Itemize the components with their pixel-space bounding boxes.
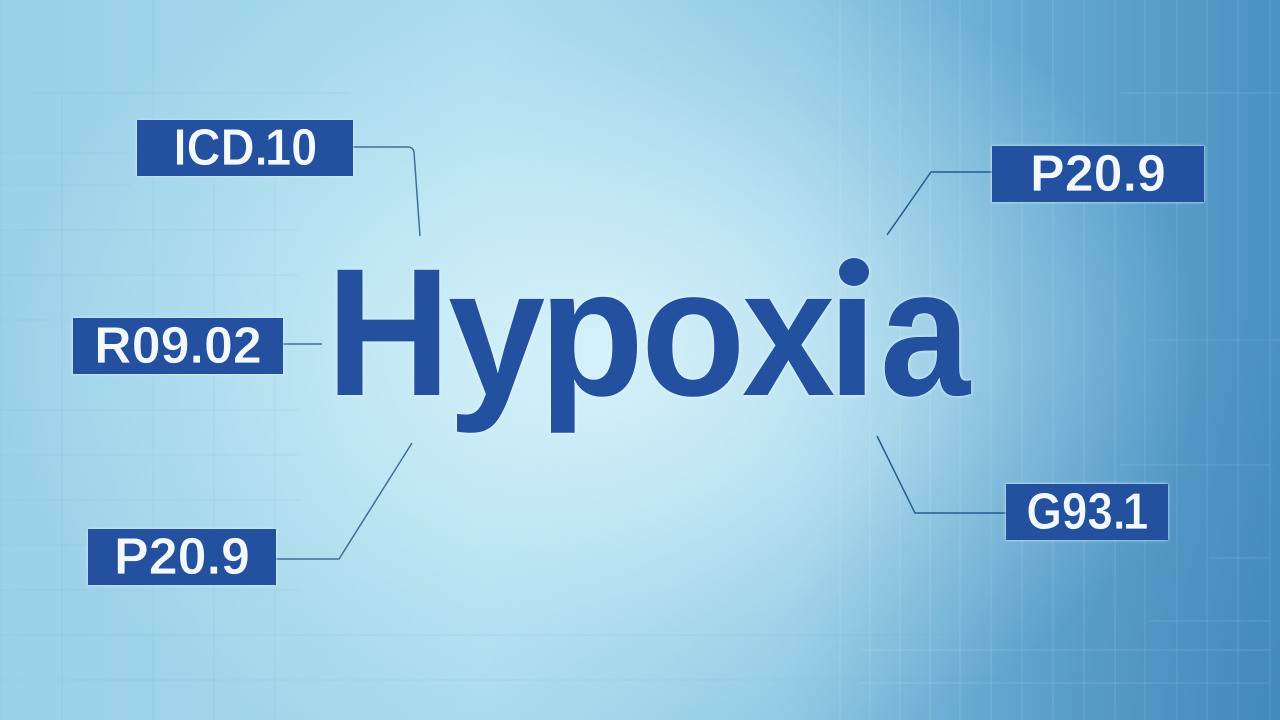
code tag: P20.9 right: P20.9 xyxy=(1030,145,1166,203)
title: x xyxy=(742,230,835,434)
code tag: R09.02: R09.02 xyxy=(94,317,262,375)
title: i xyxy=(827,230,878,434)
title: a xyxy=(880,230,970,434)
title xyxy=(326,230,974,434)
code tag: ICD.10 xyxy=(137,120,353,176)
code tag: ICD.10: ICD.10 xyxy=(173,119,317,177)
code tag: G93.1: G93.1 xyxy=(1026,483,1148,541)
code tag: P20.9 left: P20.9 xyxy=(114,528,250,586)
title: o xyxy=(641,230,746,434)
title: p xyxy=(539,230,644,434)
title: y xyxy=(448,230,545,434)
title: H xyxy=(326,230,451,434)
code tag: P20.9 right xyxy=(992,146,1204,202)
